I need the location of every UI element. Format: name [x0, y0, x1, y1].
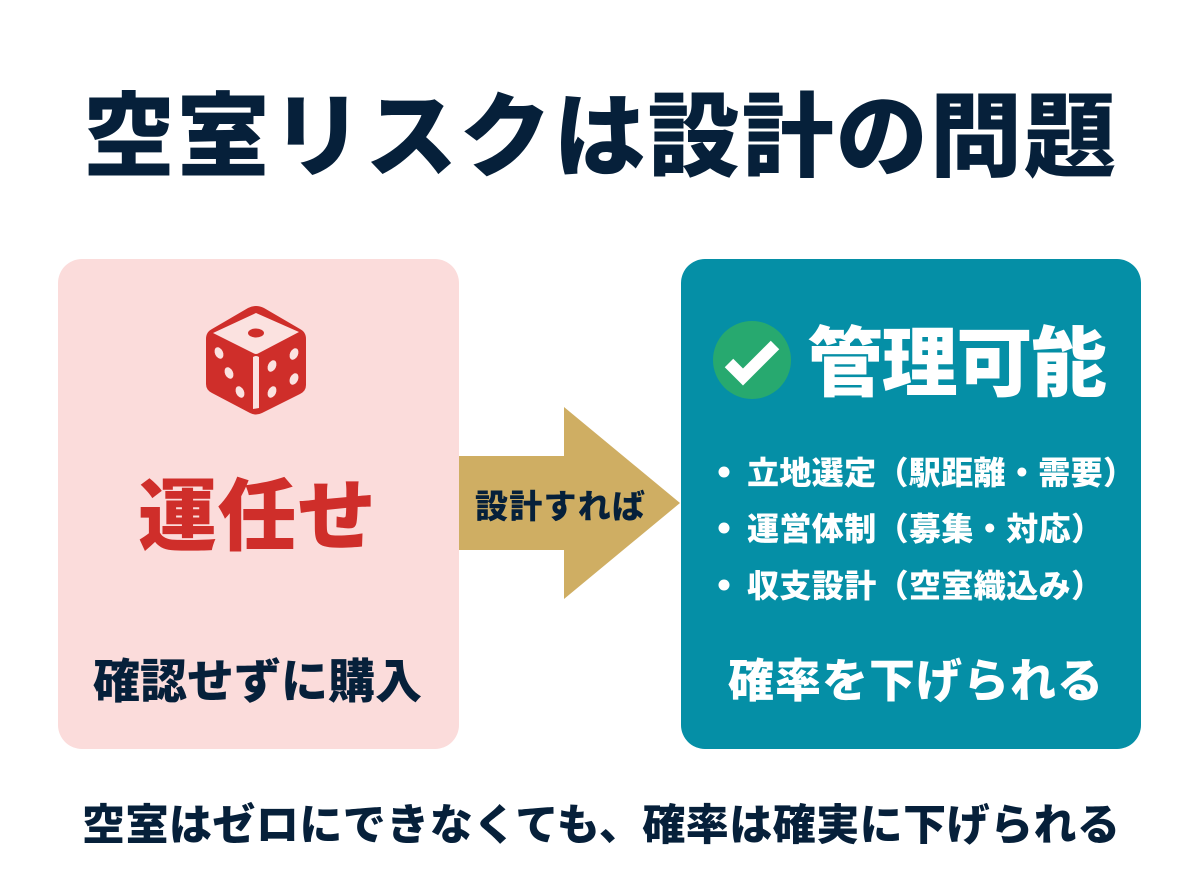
text: can lower probability: 確率を下げられる	[728, 655, 1103, 707]
heading: manageable: 管理可能	[807, 322, 1107, 407]
panel: manageable	[681, 259, 1141, 749]
arrow	[459, 407, 680, 599]
footer message: 空室はゼロにできなくても、確率は確実に下げられる	[82, 801, 1120, 850]
title: 空室リスクは設計の問題	[83, 87, 1116, 189]
bullet list	[718, 455, 1135, 604]
bullet 3: 収支設計（空室織込み）	[747, 568, 1103, 604]
bullet 1: 立地選定（駅距離・需要）	[747, 455, 1135, 491]
arrow label: 設計すれば	[475, 488, 645, 525]
icon: dice	[206, 306, 306, 414]
panel: luck	[58, 259, 459, 749]
text: purchase without checking: 確認せずに購入	[93, 655, 422, 708]
icon: check	[713, 321, 791, 399]
heading: luck: 運任せ	[138, 472, 376, 561]
bullet 2: 運営体制（募集・対応）	[747, 511, 1103, 547]
